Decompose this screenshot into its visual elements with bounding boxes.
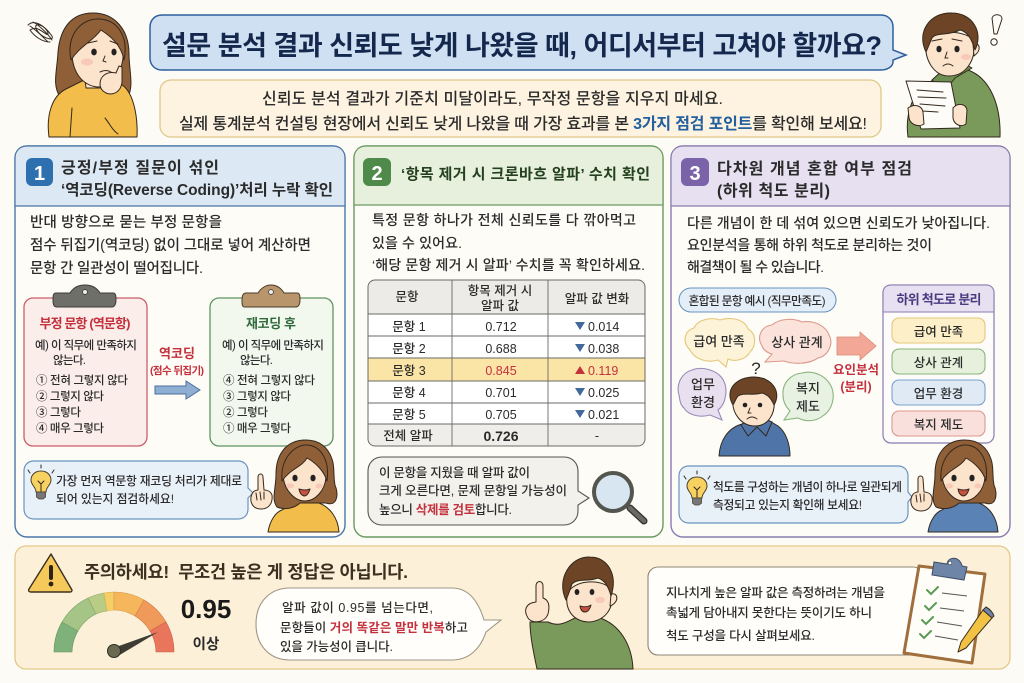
arrow: factor analysis	[833, 332, 879, 394]
clipboard: negative item: 부정 문항 (역문항)	[40, 316, 130, 331]
table: alpha if item deleted: 0.025	[588, 386, 619, 400]
tip callout 1: 가장 먼저 역문항 재코딩 처리가 제대로	[56, 474, 242, 488]
icon: magnifier	[594, 473, 644, 521]
clipboard: after recoding: ④ 전혀 그렇지 않다	[223, 373, 315, 387]
panel 2 header: ‘항목 제거 시 크론바흐 알파’ 수치 확인	[401, 166, 650, 183]
panel 3 header: (하위 척도 분리)	[717, 182, 830, 200]
callout: delete review: 높으니 삭제를 검토합니다.	[379, 502, 512, 517]
thought clouds with concepts: 업무	[691, 377, 715, 392]
panel 3 header: 3	[689, 163, 701, 185]
arrow: reverse coding	[150, 346, 204, 399]
table: alpha if item deleted: 0.688	[485, 342, 517, 356]
tip callout 1: 되어 있는지 점검하세요!	[56, 492, 174, 506]
title banner	[150, 15, 906, 70]
clipboard: after recoding: 재코딩 후	[246, 316, 296, 331]
clipboard: after recoding: 예) 이 직무에 만족하지	[222, 339, 324, 352]
subscale panel: 하위 척도로 분리	[896, 292, 982, 307]
clipboard: negative item: 예) 이 직무에 만족하지	[35, 339, 137, 352]
table: alpha if item deleted: 0.845	[485, 364, 517, 378]
gauge chart	[54, 592, 174, 658]
arrow: reverse coding: (점수 뒤집기)	[150, 364, 204, 377]
callout: delete review: 이 문항을 지웠을 때 알파 값이	[379, 465, 530, 480]
panel 1 header	[15, 146, 345, 206]
title banner: 설문 분석 결과 신뢰도 낮게 나왔을 때, 어디서부터 고쳐야 할까요?	[162, 31, 882, 61]
character: pointing woman yellow	[251, 440, 339, 532]
panel 1: reverse coding	[15, 146, 345, 537]
thought clouds with concepts: 상사 관계	[771, 335, 823, 350]
panel 2 header: 2	[371, 163, 383, 185]
arrow: reverse coding: 역코딩	[159, 346, 195, 361]
clipboard: negative item: ① 전혀 그렇지 않다	[36, 373, 128, 387]
warning heading: 주의하세요! 무조건 높은 게 정답은 아닙니다.	[84, 562, 408, 582]
clipboard: negative item: ③ 그렇다	[36, 405, 81, 419]
table: alpha if item deleted: 문항 1	[392, 320, 426, 334]
speech bubble: alpha over 0.95: 있을 가능성이 큽니다.	[280, 640, 393, 654]
thought clouds with concepts: 제도	[796, 399, 820, 414]
panel 3 header: 다차원 개념 혼합 여부 점검	[717, 160, 912, 178]
clipboard: after recoding: ② 그렇다	[223, 405, 268, 419]
table: alpha if item deleted: 0.014	[588, 320, 619, 334]
panel 1 header: ‘역코딩(Reverse Coding)’처리 누락 확인	[61, 181, 333, 199]
table: alpha if item deleted	[368, 280, 645, 446]
gauge value	[181, 594, 231, 653]
thought clouds with concepts	[678, 318, 833, 421]
table: alpha if item deleted: 알파 값 변화	[565, 292, 630, 306]
character: pointing man green	[526, 557, 633, 669]
warning panel	[15, 546, 1010, 669]
panel 3 body text	[687, 215, 990, 275]
panel 3 body text: 해결책이 될 수 있습니다.	[687, 259, 824, 275]
callout: delete review	[368, 457, 589, 525]
speech bubble: alpha over 0.95: 문항들이 거의 똑같은 말만 반복하고	[280, 620, 468, 635]
icon: warning triangle	[29, 554, 72, 592]
character: thinking woman	[28, 13, 137, 137]
panel 2 body text: ‘해당 문항 제거 시 알파’ 수치를 꼭 확인하세요.	[372, 257, 645, 273]
text box: too high alpha: 지나치게 높은 알파 값은 측정하려는 개념을	[666, 586, 885, 600]
intro text box: 실제 통계분석 컨설팅 현장에서 신뢰도 낮게 나왔을 때 가장 효과를 본 3가지 점검 포인트를 확인해 보세요!	[179, 115, 867, 133]
panel 1 header: 1	[34, 163, 45, 185]
thought clouds with concepts: 급여 만족	[693, 334, 745, 349]
table: alpha if item deleted: 알파 값	[481, 299, 519, 313]
panel 1 body text: 문항 간 일관성이 떨어집니다.	[30, 260, 203, 277]
icon: checklist clipboard with pencil	[904, 558, 994, 663]
clipboard: negative item: ② 그렇지 않다	[36, 389, 104, 403]
gauge value: 0.95	[181, 594, 231, 624]
character: confused man: ?	[751, 359, 761, 378]
panel 3: dimensionality	[671, 146, 1010, 537]
table: alpha if item deleted: 0.712	[485, 320, 517, 334]
character: confused man	[719, 359, 790, 456]
character: pointing woman blue	[911, 440, 998, 532]
tip callout 3: 측정되고 있는지 확인해 보세요!	[713, 498, 862, 512]
pill: mixed item example	[679, 288, 836, 312]
clipboard: after recoding: 않는다.	[240, 354, 273, 367]
character: man reading paper	[906, 13, 1002, 137]
clipboard: after recoding	[210, 285, 333, 446]
subscale panel	[883, 285, 994, 443]
intro text box	[160, 80, 881, 137]
panel 3 body text: 다른 개념이 한 데 섞여 있으면 신뢰도가 낮아집니다.	[687, 215, 990, 231]
table: alpha if item deleted: 0.021	[588, 408, 619, 422]
table: alpha if item deleted: 0.726	[483, 428, 519, 444]
panel 2 header	[354, 146, 663, 205]
panel 1 header: 긍정/부정 질문이 섞인	[61, 159, 219, 177]
table: alpha if item deleted: -	[595, 429, 599, 443]
table: alpha if item deleted: 문항 5	[392, 408, 426, 422]
text box: too high alpha	[648, 567, 923, 655]
table: alpha if item deleted: 문항	[395, 290, 419, 304]
table: alpha if item deleted: 전체 알파	[383, 429, 433, 443]
table: alpha if item deleted: 문항 2	[392, 342, 426, 356]
tip callout 3: 척도를 구성하는 개념이 하나로 일관되게	[713, 480, 902, 494]
tip callout 1	[24, 461, 253, 519]
gauge value: 이상	[193, 636, 219, 653]
clipboard: negative item	[24, 285, 147, 446]
speech bubble: alpha over 0.95	[256, 588, 501, 660]
arrow: factor analysis: (분리)	[840, 380, 872, 394]
table: alpha if item deleted: 문항 4	[392, 386, 426, 400]
subscale panel: 복지 제도	[914, 418, 963, 432]
clipboard: after recoding: ① 매우 그렇다	[223, 421, 291, 435]
intro text box: 신뢰도 분석 결과가 기준치 미달이라도, 무작정 문항을 지우지 마세요.	[262, 90, 723, 108]
panel 3 header	[671, 146, 1010, 206]
panel 1 body text: 점수 뒤집기(역코딩) 없이 그대로 넣어 계산하면	[30, 237, 311, 254]
clipboard: negative item: ④ 매우 그렇다	[36, 421, 104, 435]
thought clouds with concepts: 복지	[796, 381, 820, 396]
panel 1 body text: 반대 방향으로 묻는 부정 문항을	[30, 214, 222, 231]
table: alpha if item deleted: 문항 3	[392, 364, 426, 378]
subscale panel: 업무 환경	[914, 387, 963, 401]
clipboard: negative item: 않는다.	[53, 354, 86, 367]
pill: mixed item example: 혼합된 문항 예시 (직무만족도)	[688, 294, 826, 308]
subscale panel: 상사 관계	[914, 356, 963, 370]
panel 2: cronbach alpha	[354, 146, 663, 537]
thought clouds with concepts: 환경	[691, 395, 715, 410]
text box: too high alpha: 척도 구성을 다시 살펴보세요.	[666, 629, 815, 643]
panel 1 body text	[30, 214, 311, 277]
arrow: factor analysis: 요인분석	[833, 363, 879, 377]
table: alpha if item deleted: 0.701	[485, 386, 517, 400]
tip callout 3	[679, 466, 912, 523]
clipboard: after recoding: ③ 그렇지 않다	[223, 389, 291, 403]
callout: delete review: 크게 오른다면, 문제 문항일 가능성이	[379, 484, 567, 498]
table: alpha if item deleted: 항목 제거 시	[468, 284, 532, 298]
panel 3 body text: 요인분석을 통해 하위 척도로 분리하는 것이	[687, 237, 932, 253]
panel 2 body text: 있을 수 있어요.	[372, 235, 462, 251]
panel 2 body text: 특정 문항 하나가 전체 신뢰도를 다 깎아먹고	[372, 212, 636, 228]
table: alpha if item deleted: 0.705	[485, 408, 517, 422]
table: alpha if item deleted: 0.038	[588, 342, 619, 356]
text box: too high alpha: 촉넓게 담아내지 못한다는 뜻이기도 하니	[666, 606, 872, 620]
table: alpha if item deleted: 0.119	[588, 364, 618, 378]
speech bubble: alpha over 0.95: 알파 값이 0.95를 넘는다면,	[282, 601, 433, 615]
subscale panel: 급여 만족	[914, 325, 963, 339]
panel 2 body text	[372, 212, 645, 273]
